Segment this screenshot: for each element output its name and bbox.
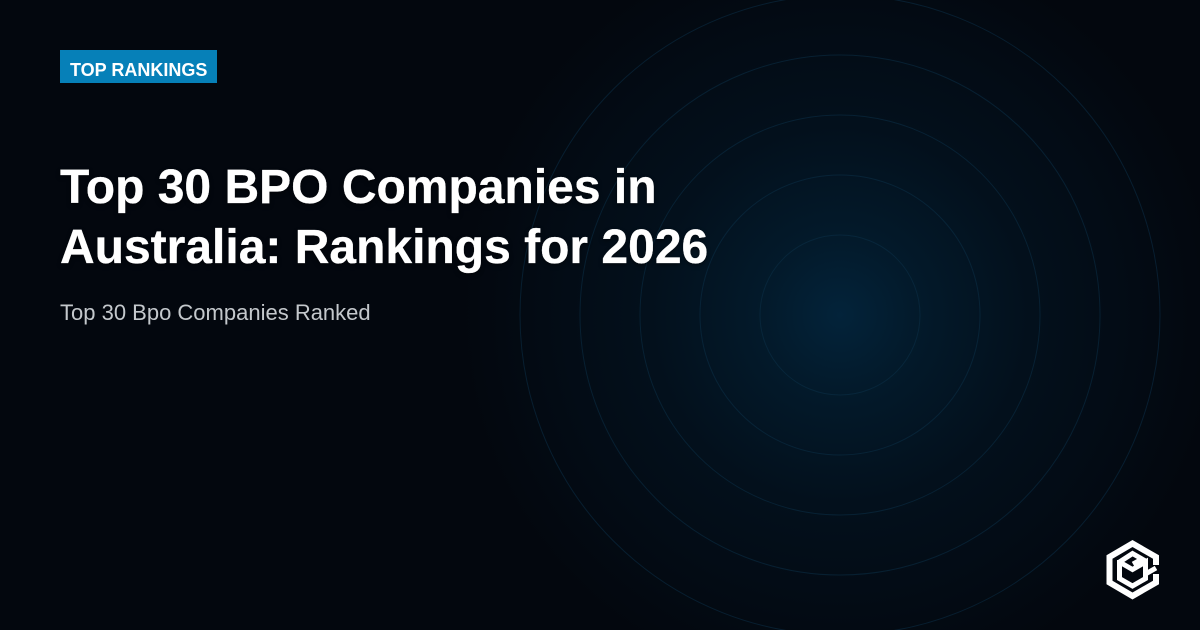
- subtitle: Top 30 Bpo Companies Ranked: [60, 300, 371, 325]
- badge: top rankings: [60, 50, 217, 83]
- title: Australia: Rankings for 2026: [60, 221, 708, 274]
- title: [60, 161, 708, 274]
- badge: top rankings: TOP RANKINGS: [70, 60, 207, 80]
- icon: hexagon cube logo: [1106, 540, 1159, 600]
- title: Top 30 BPO Companies in: [60, 161, 657, 214]
